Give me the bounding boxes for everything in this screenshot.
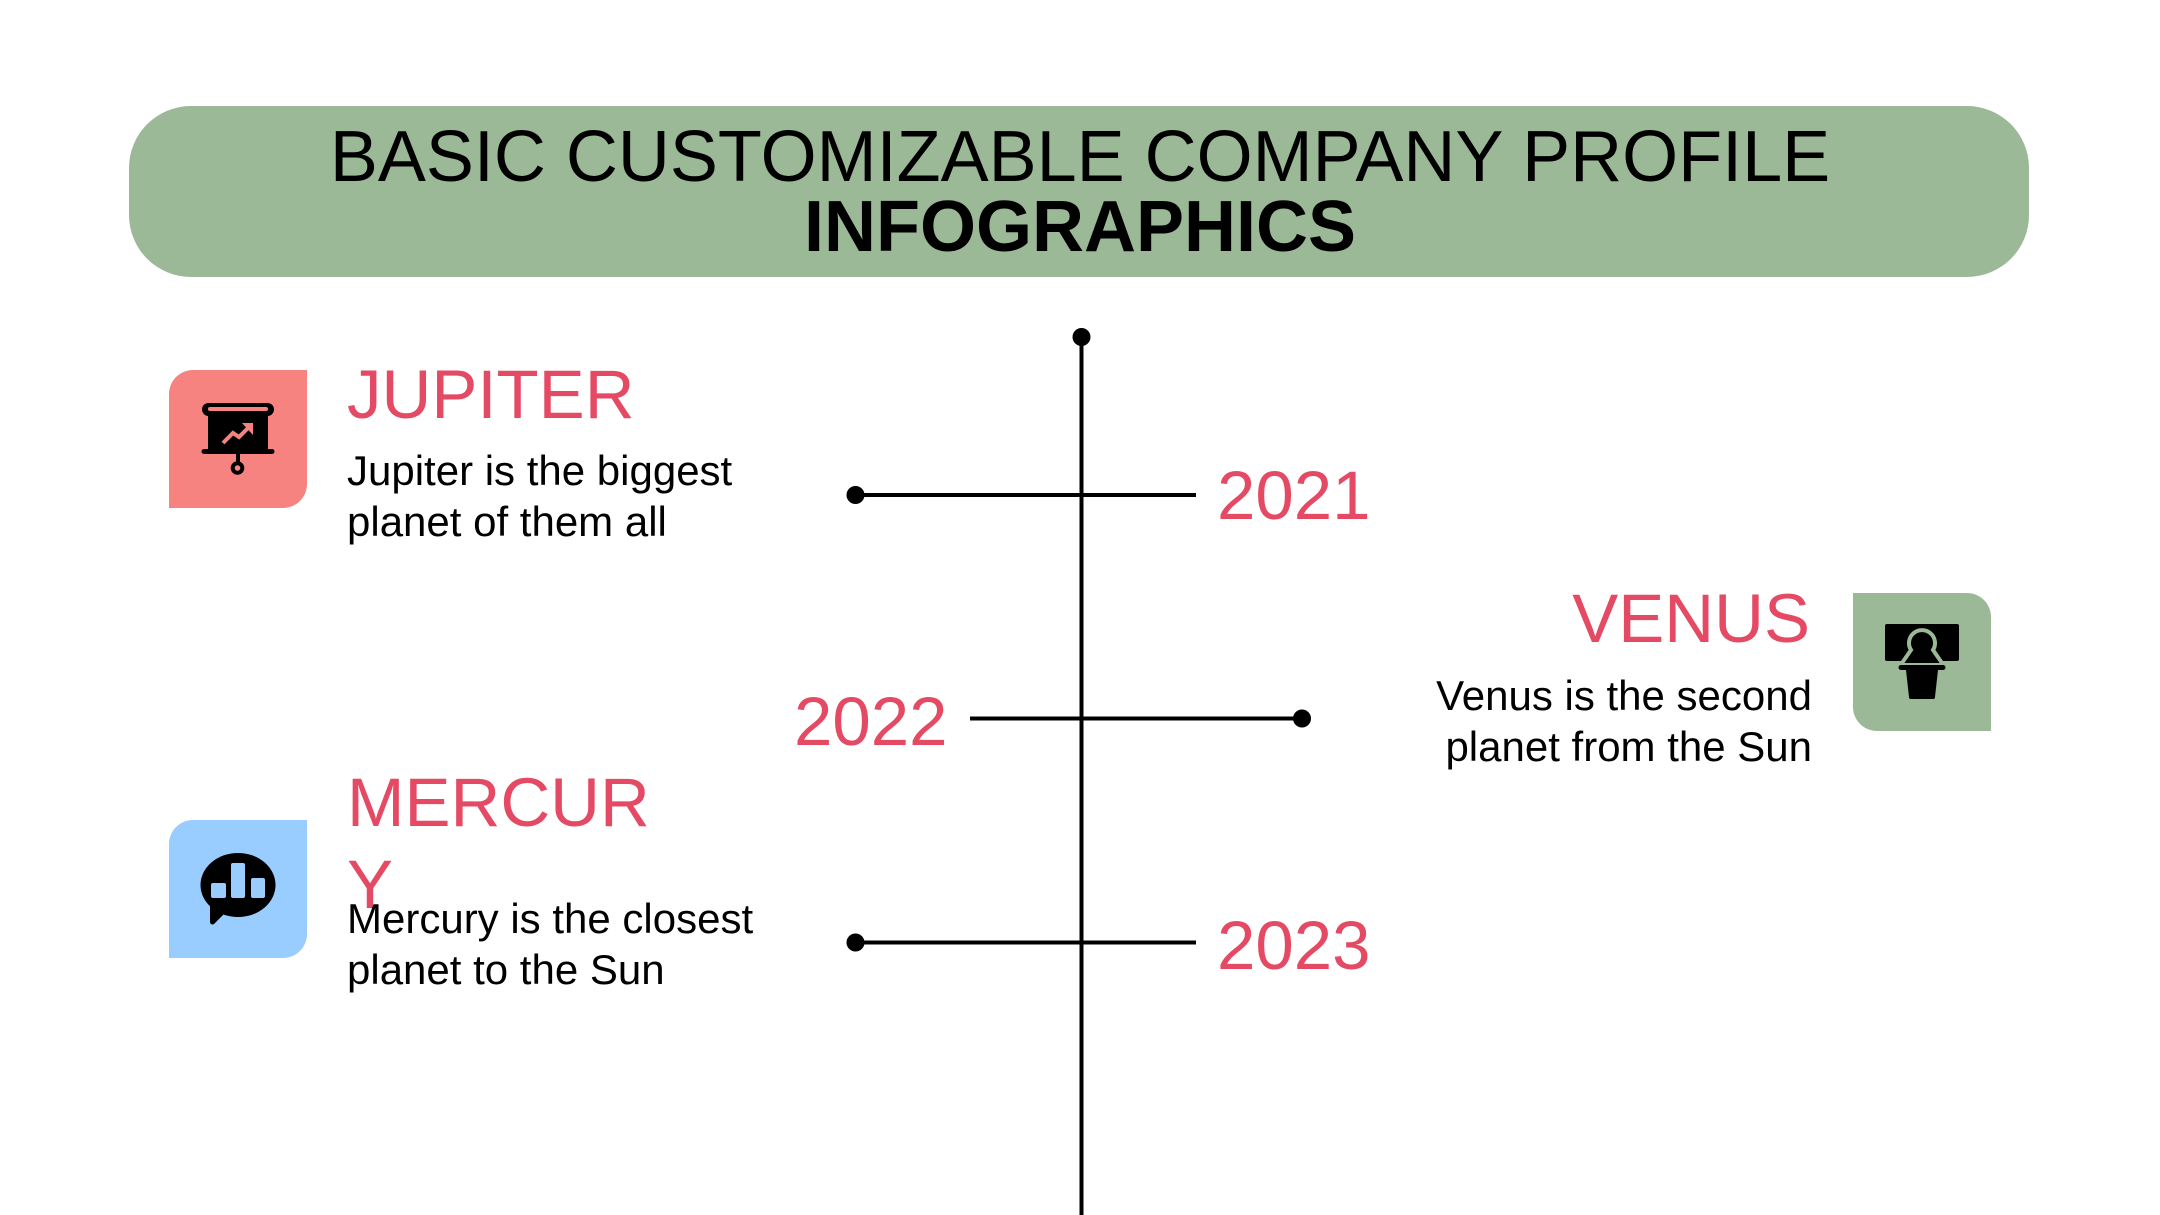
text: Jupiter description: Jupiter is the biggest	[347, 447, 732, 494]
icon: podium speaker	[1853, 593, 1991, 731]
heading: Mercury (wraps): Y	[347, 846, 393, 923]
title text	[330, 117, 1830, 267]
text: Venus description: planet from the Sun	[1445, 722, 1812, 770]
text: Jupiter description	[347, 447, 732, 544]
text: Mercury description	[347, 895, 753, 992]
title text: INFOGRAPHICS	[804, 187, 1356, 267]
icon: presentation board	[169, 370, 307, 508]
year 2021: 2021	[1217, 457, 1370, 534]
title text: BASIC CUSTOMIZABLE COMPANY PROFILE	[330, 117, 1830, 197]
heading: Jupiter: JUPITER	[347, 356, 635, 433]
year 2023: 2023	[1217, 907, 1370, 984]
text: Jupiter description: planet of them all	[347, 498, 667, 544]
text: Venus description: Venus is the second	[1436, 672, 1812, 719]
heading: Mercury (wraps)	[347, 764, 650, 923]
heading: Venus: VENUS	[1572, 580, 1810, 657]
year 2022: 2022	[794, 683, 948, 760]
text: Mercury description: planet to the Sun	[347, 946, 665, 992]
title banner	[129, 106, 2029, 277]
icon: chat bubble with bars	[169, 820, 307, 958]
text: Mercury description: Mercury is the closest	[347, 895, 753, 942]
heading: Mercury (wraps): MERCUR	[347, 764, 650, 841]
text: Venus description	[1436, 672, 1812, 770]
